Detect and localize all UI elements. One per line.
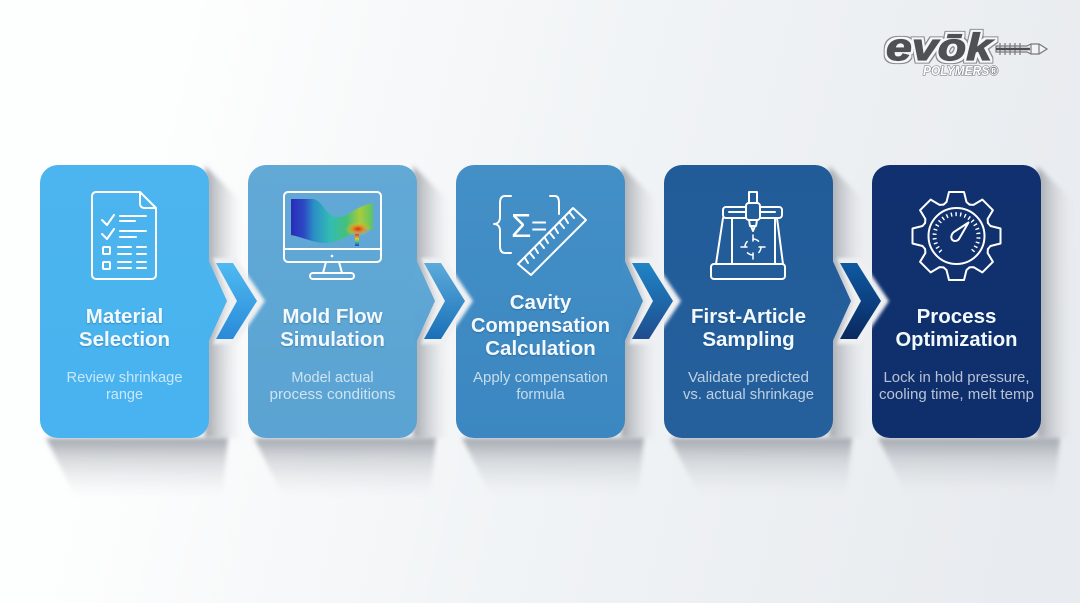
icon: checklist document bbox=[92, 192, 156, 279]
heading bbox=[280, 305, 385, 351]
logo subtitle: POLYMERS® bbox=[923, 64, 999, 78]
panel: material selection bbox=[40, 165, 242, 498]
heading: Selection bbox=[79, 328, 170, 351]
heading bbox=[79, 305, 170, 351]
icon: CNC sampling machine bbox=[711, 192, 785, 279]
icon: formula and ruler: Σ bbox=[511, 207, 531, 244]
heading bbox=[471, 291, 610, 360]
heading: Cavity bbox=[510, 291, 572, 314]
panel: process optimization bbox=[872, 165, 1074, 498]
description: vs. actual shrinkage bbox=[683, 387, 814, 403]
chevron arrow 1 bbox=[213, 258, 265, 344]
description bbox=[879, 370, 1034, 403]
heading: Mold Flow bbox=[282, 305, 383, 328]
description: Review shrinkage bbox=[66, 370, 182, 386]
heading bbox=[691, 305, 806, 351]
description bbox=[473, 370, 608, 403]
description: Lock in hold pressure, bbox=[884, 370, 1030, 386]
description bbox=[66, 370, 182, 403]
heading: Compensation bbox=[471, 314, 610, 337]
heading: Sampling bbox=[702, 328, 795, 351]
chevron arrow 3 bbox=[629, 258, 681, 344]
description bbox=[270, 370, 396, 403]
heading: Optimization bbox=[896, 328, 1018, 351]
description: Apply compensation bbox=[473, 370, 608, 386]
description: formula bbox=[516, 387, 566, 403]
heading: Calculation bbox=[485, 337, 596, 360]
logo: Evok Polymers bbox=[886, 27, 1047, 78]
panel: cavity compensation calculation bbox=[456, 165, 658, 498]
logo screw bbox=[996, 43, 1047, 55]
heading: Simulation bbox=[280, 328, 385, 351]
description: Validate predicted bbox=[688, 370, 809, 386]
logo wordmark: evōk bbox=[886, 27, 994, 69]
description: process conditions bbox=[270, 387, 396, 403]
heading: Material bbox=[86, 305, 163, 328]
description bbox=[683, 370, 814, 403]
icon: formula and ruler: = bbox=[531, 210, 547, 241]
description: Model actual bbox=[291, 370, 374, 386]
icon: gear with gauge bbox=[912, 192, 1000, 280]
heading: Process bbox=[917, 305, 996, 328]
icon: formula and ruler bbox=[494, 196, 586, 275]
description: cooling time, melt temp bbox=[879, 387, 1034, 403]
icon: monitor with simulation bbox=[284, 192, 381, 279]
description: range bbox=[106, 387, 143, 403]
panel: first-article sampling bbox=[664, 165, 866, 498]
heading bbox=[896, 305, 1018, 351]
heading: First-Article bbox=[691, 305, 806, 328]
chevron arrow 2 bbox=[421, 258, 473, 344]
panel: mold flow simulation bbox=[248, 165, 450, 498]
chevron arrow 4 bbox=[837, 258, 889, 344]
